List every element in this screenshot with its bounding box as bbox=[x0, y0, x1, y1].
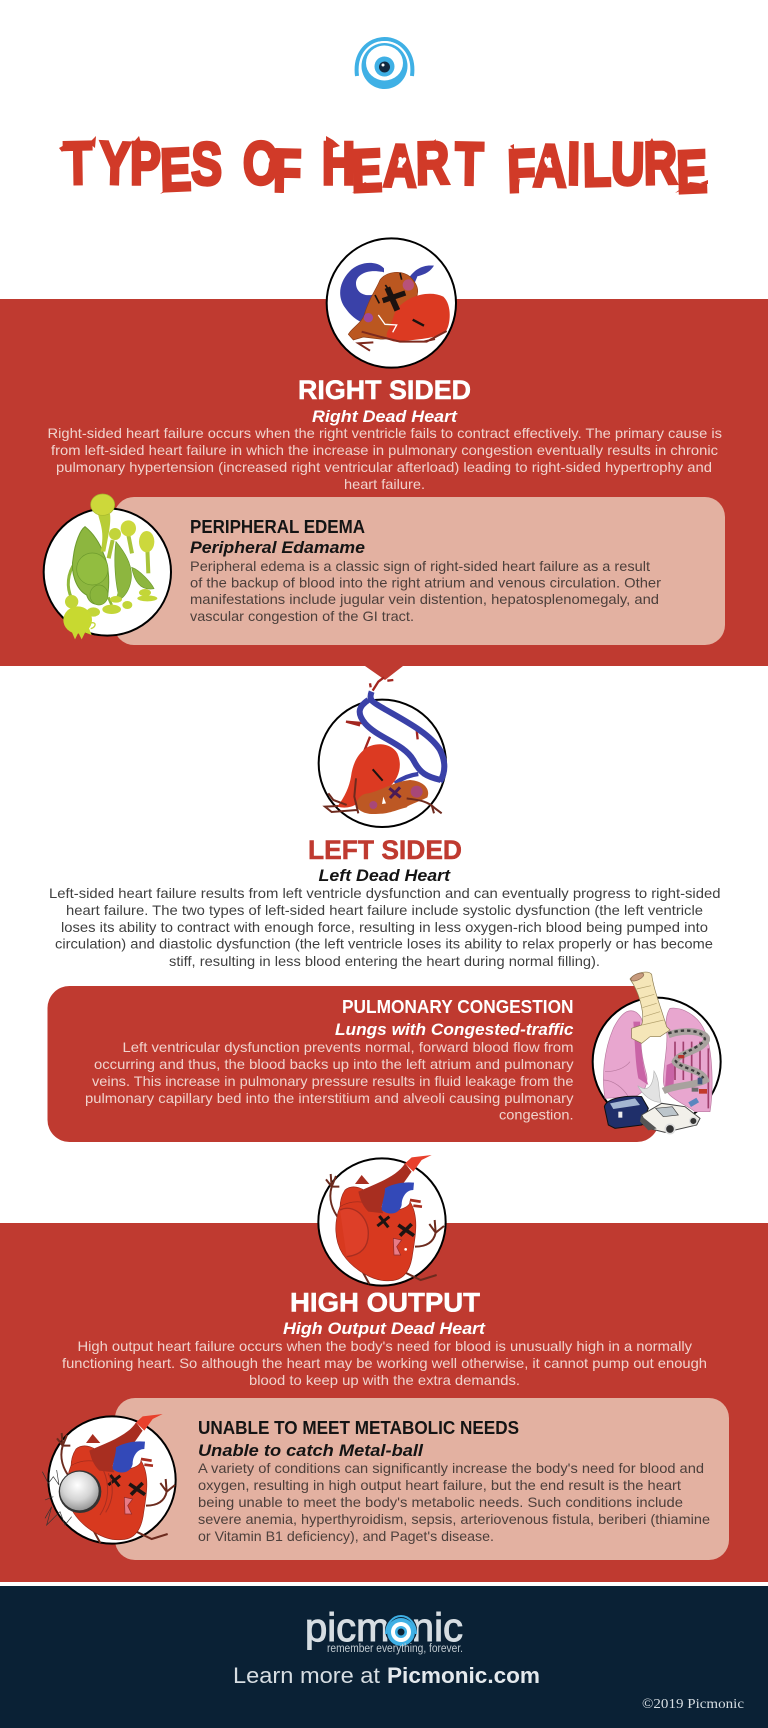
text block: right sided description bbox=[48, 425, 722, 492]
text block: pulmonary congestion description: Left ventricular dysfunction prevents normal, forward blood flow from bbox=[122, 1039, 574, 1055]
text block: pulmonary congestion description: occurring and thus, the blood backs up into the left atrium and pulmonary bbox=[94, 1056, 574, 1072]
title: TYPES OF HEART FAILURE bbox=[63, 130, 708, 206]
heading: pulmonary congestion: PULMONARY CONGESTION bbox=[342, 997, 574, 1017]
panel: right sided heart failure bbox=[0, 238, 768, 680]
text block: pulmonary congestion description: congestion. bbox=[499, 1106, 574, 1122]
panel: peripheral edema card bbox=[44, 494, 725, 645]
subheading: unable to catch metal-ball: Unable to catch Metal-ball bbox=[198, 1441, 424, 1460]
text block: right sided description: from left-sided heart failure in which the increase in pulmonary congestion eventually results in chronic bbox=[51, 442, 718, 458]
panel: high output heart failure bbox=[0, 1155, 768, 1582]
text block: metabolic needs description: oxygen, resulting in high output heart failure, but the end result is the heart bbox=[198, 1477, 681, 1493]
text block: peripheral edema description bbox=[190, 558, 661, 624]
icon: left dead heart in circle bbox=[319, 677, 446, 827]
icon: peripheral edamame in circle bbox=[44, 494, 171, 639]
logo: Picmonic eye with headphones bbox=[357, 39, 412, 91]
text block: left sided description: loses its ability to contract with enough force, resulting in less oxygen-rich blood being pumped into bbox=[61, 919, 708, 935]
subheading: high output dead heart: High Output Dead Heart bbox=[283, 1319, 486, 1338]
subheading: lungs with congested traffic: Lungs with Congested-traffic bbox=[335, 1020, 574, 1039]
text block: left sided description: Left-sided heart failure results from left ventricle dysfunction and can eventually progress to right-sided bbox=[49, 885, 720, 901]
call to action: learn more: Learn more at bbox=[233, 1663, 380, 1688]
logo: picmonic wordmark: remember everything, forever. bbox=[327, 1643, 463, 1655]
heading: peripheral edema: PERIPHERAL EDEMA bbox=[190, 517, 365, 537]
heading: high output: HIGH OUTPUT bbox=[290, 1288, 480, 1318]
text block: pulmonary congestion description bbox=[85, 1039, 574, 1122]
text block: left sided description: heart failure. The two types of left-sided heart failure include systolic dysfunction (the left ventricle bbox=[66, 902, 703, 918]
panel: footer bbox=[0, 1586, 768, 1728]
icon: high output dead heart in circle bbox=[318, 1155, 446, 1286]
subheading: left dead heart: Left Dead Heart bbox=[318, 866, 451, 885]
copyright: ©2019 Picmonic bbox=[642, 1696, 744, 1711]
icon: unable to catch metal-ball in circle bbox=[42, 1414, 176, 1544]
panel: pulmonary congestion card bbox=[48, 971, 721, 1142]
text block: high output description: functioning heart. So although the heart may be working well otherwise, it cannot pump out enough bbox=[62, 1355, 707, 1371]
text block: peripheral edema description: Peripheral edema is a classic sign of right-sided heart failure as a result bbox=[190, 558, 650, 574]
icon: right dead heart in circle bbox=[327, 238, 456, 368]
text block: left sided description: circulation) and diastolic dysfunction (the left ventricle loses its ability to relax properly or has become bbox=[55, 936, 713, 952]
text block: peripheral edema description: of the backup of blood into the right atrium and venous circulation. Other bbox=[190, 574, 661, 590]
text block: left sided description bbox=[49, 885, 720, 969]
text block: peripheral edema description: manifestations include jugular vein distention, hepatosplenomegaly, and bbox=[190, 591, 659, 607]
panel: unable to meet metabolic needs card bbox=[42, 1398, 729, 1560]
text block: pulmonary congestion description: veins. This increase in pulmonary pressure results in fluid leakage from the bbox=[92, 1073, 574, 1089]
call to action: learn more: Picmonic.com bbox=[387, 1663, 540, 1688]
text block: metabolic needs description: being unable to meet the body's metabolic needs. Such conditions include bbox=[198, 1494, 683, 1510]
heading: unable to meet metabolic needs: UNABLE TO MEET METABOLIC NEEDS bbox=[198, 1418, 519, 1438]
text block: right sided description: Right-sided heart failure occurs when the right ventricle fails to contract effectively. The primary cause is bbox=[48, 425, 722, 441]
text block: right sided description: heart failure. bbox=[344, 476, 425, 492]
text block: left sided description: stiff, resulting in less blood entering the heart during normal filling). bbox=[169, 953, 600, 969]
text block: peripheral edema description: vascular congestion of the GI tract. bbox=[190, 608, 414, 624]
text block: high output description: High output heart failure occurs when the body's need for blood is unusually high in a normally bbox=[78, 1338, 692, 1354]
heading: left sided: LEFT SIDED bbox=[308, 835, 462, 865]
text block: right sided description: pulmonary hypertension (increased right ventricular afterload) leading to right-sided hypertrophy and bbox=[56, 459, 712, 475]
logo: picmonic wordmark: picmonic bbox=[305, 1606, 463, 1650]
text block: metabolic needs description: or Vitamin B1 deficiency), and Paget's disease. bbox=[198, 1528, 494, 1544]
icon: lungs with congested traffic in circle bbox=[593, 971, 721, 1134]
heading: right sided: RIGHT SIDED bbox=[298, 375, 471, 405]
subheading: right dead heart: Right Dead Heart bbox=[312, 407, 458, 426]
text block: pulmonary congestion description: pulmonary capillary bed into the interstitium and alveoli causing pulmonary bbox=[85, 1090, 574, 1106]
text block: metabolic needs description: A variety of conditions can significantly increase the body's need for blood and bbox=[198, 1460, 704, 1476]
call to action: learn more bbox=[233, 1663, 540, 1688]
text block: high output description bbox=[62, 1338, 707, 1388]
text block: metabolic needs description bbox=[198, 1460, 710, 1544]
text block: high output description: blood to keep up with the extra demands. bbox=[249, 1372, 520, 1388]
text block: metabolic needs description: severe anemia, hyperthyroidism, sepsis, arteriovenous fistula, beriberi (thiamine bbox=[198, 1511, 710, 1527]
subheading: peripheral edamame: Peripheral Edamame bbox=[190, 538, 365, 557]
